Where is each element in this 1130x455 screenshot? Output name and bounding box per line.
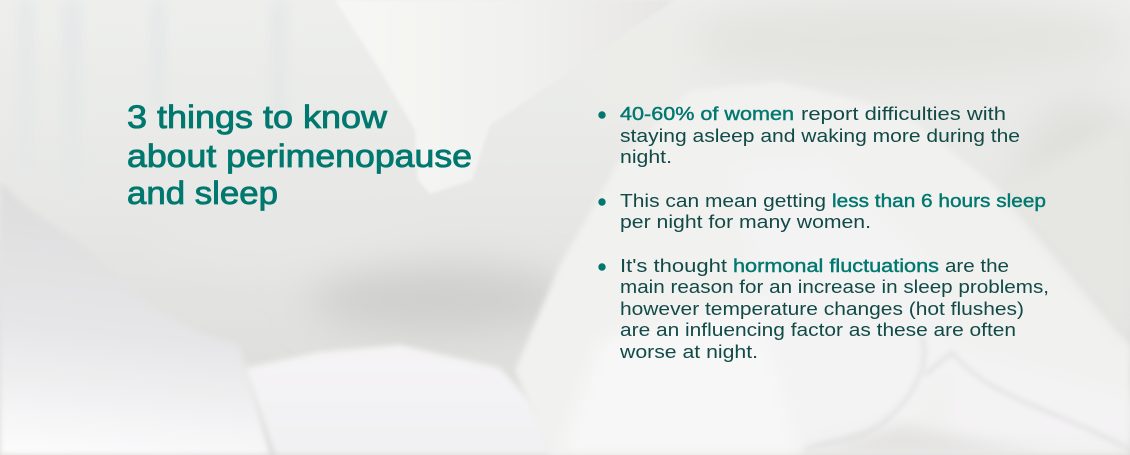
- bullet 1: staying asleep and waking more during the: [620, 126, 1020, 146]
- bullet 3: worse at night.: [619, 342, 758, 362]
- linen stripes top left: [18, 0, 288, 190]
- title: 3 things to know: [127, 99, 388, 135]
- right duvet: [515, 82, 1130, 455]
- left pillow: [0, 182, 270, 455]
- top pillow: [335, 0, 675, 194]
- bullet 2: This can mean getting: [620, 191, 826, 211]
- bullet 2: less than 6 hours sleep: [832, 191, 1046, 211]
- bullet 1: report difficulties with: [801, 104, 1006, 124]
- bullet 1: 40-60% of women: [620, 104, 794, 124]
- bullet 3: however temperature changes (hot flushes): [620, 299, 1024, 319]
- bullet list: [598, 104, 1049, 362]
- bullet 3: [598, 256, 1049, 362]
- bullet 2: [598, 191, 1046, 232]
- title: [127, 99, 472, 211]
- bullet 1: night.: [620, 147, 672, 167]
- bullet 3: are an influencing factor as these are often: [620, 320, 1016, 340]
- bullet 2: per night for many women.: [620, 212, 871, 232]
- soft shadows and highlights: [150, 0, 1130, 334]
- bullet 3: hormonal fluctuations: [733, 256, 939, 276]
- bullet 3: are the: [945, 256, 1009, 276]
- sheet fold lines: [805, 335, 1130, 450]
- bottom pillow: [245, 345, 565, 455]
- bullet 3: main reason for an increase in sleep problems,: [620, 277, 1049, 297]
- title: about perimenopause: [127, 138, 472, 174]
- title: and sleep: [127, 175, 278, 211]
- bullet 3: It's thought: [620, 256, 727, 276]
- bullet 1: [598, 104, 1020, 167]
